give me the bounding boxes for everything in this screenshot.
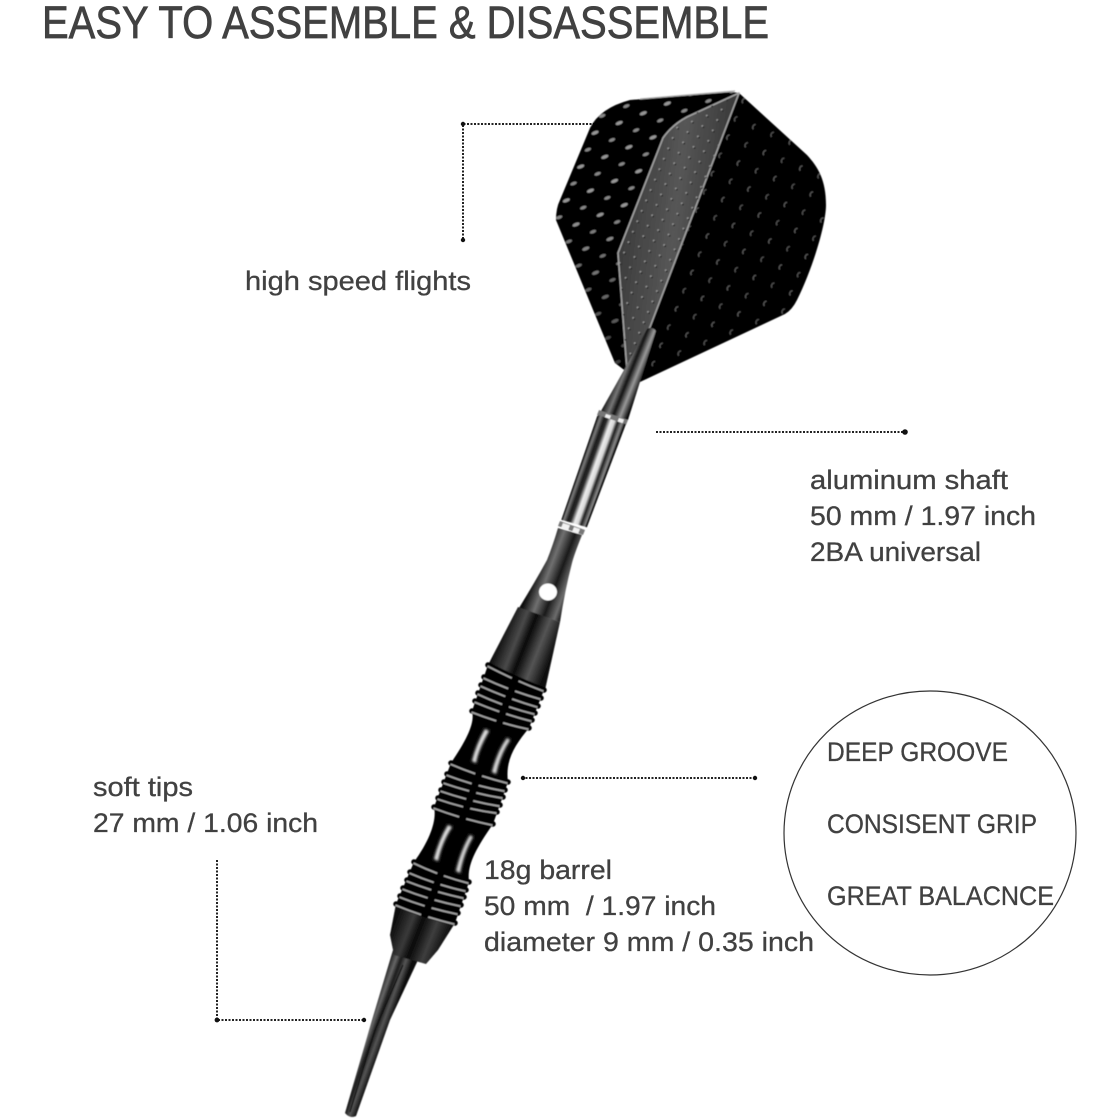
label: 18g barrel xyxy=(484,855,814,957)
leader line: shaft xyxy=(656,429,908,435)
leader line: flights xyxy=(461,122,595,242)
label: aluminum shaft: aluminum shaft xyxy=(810,465,1009,495)
icon: shaft base with hole xyxy=(519,528,582,622)
label: high speed flights: high speed flights xyxy=(245,266,471,296)
label: 18g barrel: 18g barrel xyxy=(484,855,612,885)
label: 18g barrel: 50 mm / 1.97 inch xyxy=(484,891,716,921)
dart illustration xyxy=(345,80,840,1117)
callout circle xyxy=(784,691,1076,975)
icon: barrel xyxy=(390,607,560,964)
label: soft tips: soft tips xyxy=(93,772,193,802)
label: 18g barrel: diameter 9 mm / 0.35 inch xyxy=(484,927,814,957)
leader line: barrel xyxy=(521,776,757,780)
label: soft tips: 27 mm / 1.06 inch xyxy=(93,808,318,838)
label: aluminum shaft: 50 mm / 1.97 inch xyxy=(810,501,1036,531)
callout circle: CONSISENT GRIP xyxy=(827,809,1037,839)
icon: soft tip xyxy=(345,950,418,1117)
label: soft tips xyxy=(93,772,318,838)
label: aluminum shaft xyxy=(810,465,1036,567)
icon: shaft stem xyxy=(597,328,656,425)
icon: dart flight xyxy=(540,80,840,400)
callout circle: GREAT BALACNCE xyxy=(827,881,1054,911)
callout circle: DEEP GROOVE xyxy=(827,737,1008,767)
icon: spun shaft section xyxy=(558,415,625,535)
label: aluminum shaft: 2BA universal xyxy=(810,537,981,567)
leader line: tips xyxy=(215,860,366,1022)
